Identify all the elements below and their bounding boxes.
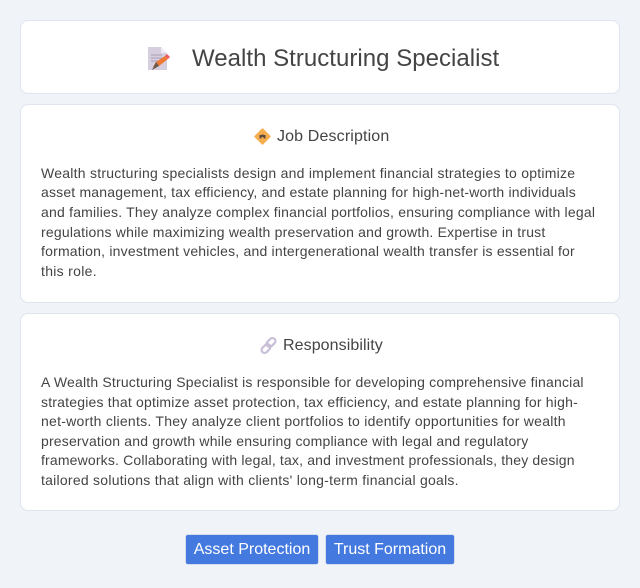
panel: title card [20, 20, 620, 94]
text block: responsibility: A Wealth Structuring Specialist is responsible for developing comprehensive financial [41, 374, 584, 390]
title: Wealth Structuring Specialist [192, 45, 499, 72]
tag: trust formation: Trust Formation [334, 541, 446, 558]
tag: trust formation [325, 534, 455, 565]
text block: job description: regulations while maximizing wealth preservation and growth. Expertise in trust [41, 224, 545, 240]
heading: responsibility: Responsibility [283, 337, 383, 354]
text block: job description [41, 165, 595, 279]
text block: responsibility: preservation and growth while ensuring compliance with legal and regulatory [41, 433, 528, 449]
text block: responsibility: strategies that optimize asset protection, tax efficiency, and estate planning for high- [41, 394, 578, 410]
icon: orange diamond sign [254, 128, 271, 145]
tag: asset protection: Asset Protection [194, 541, 310, 558]
text block: responsibility [41, 374, 584, 488]
text block: job description: Wealth structuring specialists design and implement financial strategies to optimize [41, 165, 575, 181]
heading: job description: Job Description [277, 128, 389, 145]
text block: job description: formation, investment vehicles, and intergenerational wealth transfer is essential for [41, 243, 575, 259]
tag: asset protection [185, 534, 319, 565]
icon: document with pencil [148, 47, 170, 70]
text block: responsibility: tailored solutions that align with clients' long-term financial goals. [41, 472, 459, 488]
text block: job description: asset management, tax efficiency, and estate planning for high-net-worth individuals [41, 184, 576, 200]
text block: job description: this role. [41, 263, 97, 279]
text block: responsibility: net-worth clients. They analyze client portfolios to identify opportunities for wealth [41, 413, 566, 429]
text block: job description: and families. They analyze complex financial portfolios, ensuring compliance with legal [41, 204, 595, 220]
panel: responsibility [20, 313, 620, 511]
text block: responsibility: frameworks. Collaborating with legal, tax, and investment professionals, they design [41, 452, 575, 468]
panel: job description [20, 104, 620, 303]
icon: link [260, 337, 276, 354]
